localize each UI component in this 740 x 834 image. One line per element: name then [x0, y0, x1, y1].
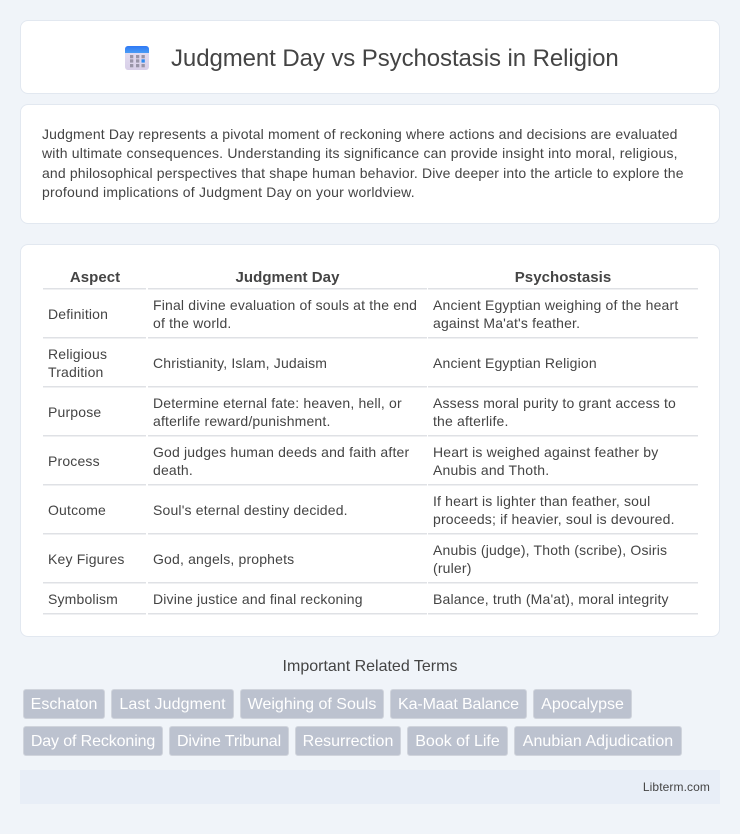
row: Purpose: Purpose [48, 404, 101, 420]
related terms heading: Important Related Terms [283, 658, 457, 675]
title: Judgment Day vs Psychostasis in Religion [171, 45, 619, 72]
header card [20, 20, 720, 94]
row: Symbolism: Divine justice and final reckoning [153, 591, 363, 607]
row: Definition: of the world. [153, 315, 231, 331]
row: Process: God judges human deeds and faith after [153, 444, 409, 460]
row: Symbolism [48, 591, 669, 607]
intro text: with ultimate consequences. Understanding its significance can provide insight into moral, religious, [42, 145, 678, 161]
row: Outcome: If heart is lighter than feather, soul [433, 493, 650, 509]
row: Purpose: Determine eternal fate: heaven, hell, or [153, 395, 402, 411]
row: Purpose: the afterlife. [433, 413, 509, 429]
row: Definition: Ancient Egyptian weighing of the heart [433, 297, 678, 313]
related terms tags: Last Judgment [119, 696, 226, 713]
table header [70, 269, 611, 286]
intro panel [20, 104, 720, 224]
related terms tags: Anubian Adjudication [523, 733, 673, 750]
intro text: and philosophical perspectives that shape human behavior. Dive deeper into the article to explore the [42, 165, 684, 181]
row: Key Figures: God, angels, prophets [153, 551, 294, 567]
row: Definition: Definition [48, 306, 108, 322]
row: Religious Tradition: Christianity, Islam, Judaism [153, 355, 327, 371]
row: Religious Tradition: Religious [48, 346, 107, 362]
related terms tags: Divine Tribunal [177, 733, 281, 750]
related terms tags: Resurrection [303, 733, 393, 750]
row: Outcome: proceeds; if heavier, soul is devoured. [433, 511, 675, 527]
related terms tags: Ka-Maat Balance [398, 696, 519, 713]
row: Purpose: afterlife reward/punishment. [153, 413, 331, 429]
row: Definition [48, 297, 678, 331]
row: Religious Tradition: Ancient Egyptian Religion [433, 355, 597, 371]
row: Key Figures: Key Figures [48, 551, 125, 567]
row: Key Figures [48, 542, 667, 576]
row: Process [48, 444, 658, 478]
row: Religious Tradition [48, 346, 597, 380]
row: Process: Heart is weighed against feather by [433, 444, 658, 460]
table header: Aspect [70, 269, 120, 286]
row: Outcome: Outcome [48, 502, 106, 518]
row: Symbolism: Balance, truth (Ma'at), moral integrity [433, 591, 669, 607]
row: Religious Tradition: Tradition [48, 364, 103, 380]
panel: comparison table [20, 244, 720, 637]
intro text: Judgment Day represents a pivotal moment of reckoning where actions and decisions are evaluated [42, 126, 678, 142]
related terms tags: Book of Life [415, 733, 500, 750]
icon: calendar [125, 46, 149, 70]
row: Purpose: Assess moral purity to grant access to [433, 395, 676, 411]
row: Outcome [48, 493, 675, 527]
related terms tags: Apocalypse [541, 696, 624, 713]
row: Process: Process [48, 453, 100, 469]
row: Symbolism: Symbolism [48, 591, 118, 607]
row: Key Figures: (ruler) [433, 560, 472, 576]
related terms tags: Weighing of Souls [248, 696, 376, 713]
intro text: profound implications of Judgment Day on your worldview. [42, 184, 415, 200]
row: Process: death. [153, 462, 193, 478]
table header: Psychostasis [515, 269, 611, 286]
intro text [42, 126, 684, 200]
row: Process: Anubis and Thoth. [433, 462, 549, 478]
related terms tags [23, 689, 682, 756]
row: Definition: Final divine evaluation of souls at the end [153, 297, 417, 313]
footer [20, 770, 720, 804]
row: Outcome: Soul's eternal destiny decided. [153, 502, 348, 518]
row: Definition: against Ma'at's feather. [433, 315, 580, 331]
related terms tags: Day of Reckoning [31, 733, 155, 750]
footer credit: Libterm.com [643, 780, 710, 794]
row: Purpose [48, 395, 676, 429]
related terms tags: Eschaton [31, 696, 97, 713]
table header: Judgment Day [236, 269, 339, 286]
row: Key Figures: Anubis (judge), Thoth (scribe), Osiris [433, 542, 667, 558]
